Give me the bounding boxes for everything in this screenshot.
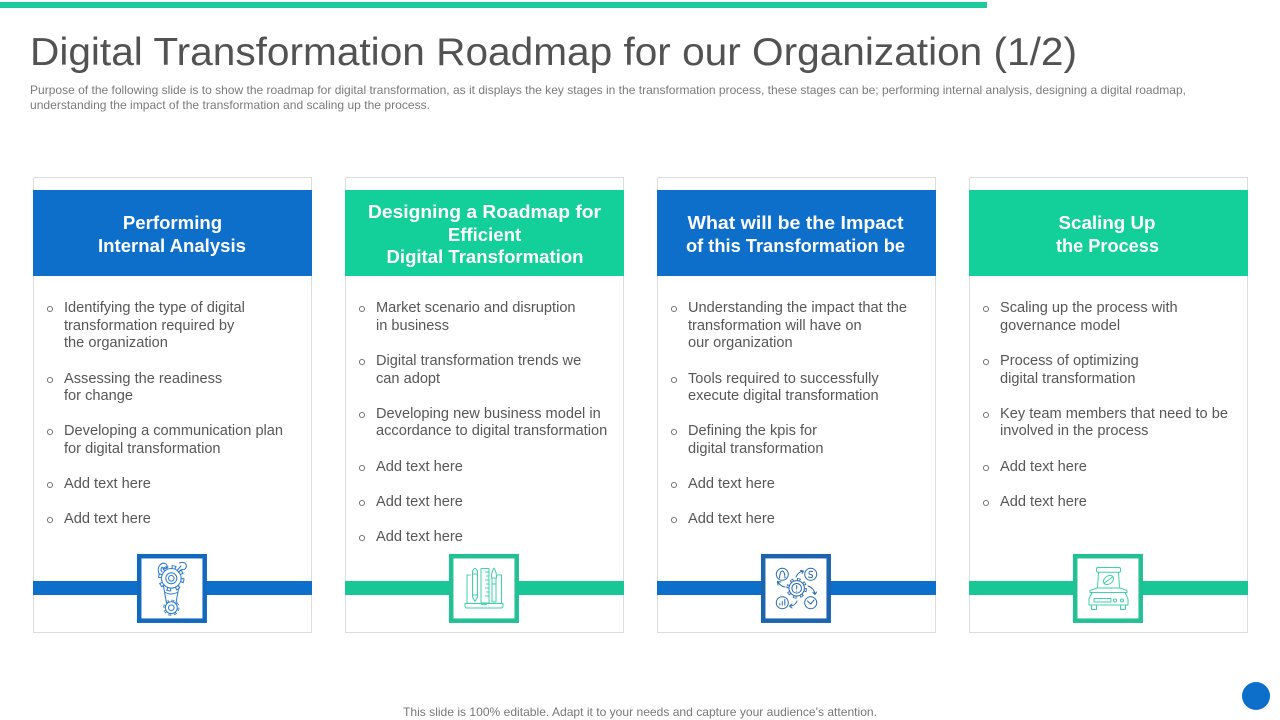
bullet list: scaling up the process: involved in the process [1000, 423, 1148, 439]
header: designing a roadmap [345, 190, 624, 276]
bullet list: designing a roadmap: in business [376, 318, 449, 334]
bullet list: performing internal analysis: for digital transformation [64, 441, 221, 457]
bullet list: performing internal analysis: the organization [64, 335, 168, 351]
footer band: green [345, 581, 624, 595]
bullet list: impact of this transformation: execute digital transformation [688, 388, 879, 404]
bullet list: designing a roadmap: Digital transformation trends we [376, 353, 581, 369]
bullet list: scaling up the process: Add text here [1000, 459, 1087, 475]
bullet list: designing a roadmap [359, 300, 607, 545]
header: scaling up the process: the Process [1056, 235, 1159, 256]
bullet list: designing a roadmap: Add text here [376, 459, 463, 475]
header: scaling up the process [969, 190, 1248, 276]
title: Digital Transformation Roadmap for our Organization (1/2) [30, 31, 1077, 74]
bullet list: designing a roadmap: accordance to digital transformation [376, 423, 607, 439]
footer note: This slide is 100% editable. Adapt it to your needs and capture your audience's attention. [403, 705, 877, 719]
header: impact of this transformation: of this Transformation be [686, 235, 905, 256]
bullet list: scaling up the process: governance model [1000, 318, 1120, 334]
bullet list: scaling up the process: Process of optimizing [1000, 353, 1139, 369]
bullet list: performing internal analysis: Add text here [64, 476, 151, 492]
bullet list: impact of this transformation: Defining the kpis for [688, 423, 817, 439]
header: performing internal analysis: Internal Analysis [98, 235, 246, 256]
bullet list: designing a roadmap: Developing new business model in [376, 406, 601, 422]
description: understanding the impact of the transformation and scaling up the process. [30, 98, 430, 112]
header: scaling up the process: Scaling Up [1058, 212, 1156, 233]
bullet list: performing internal analysis: Identifying the type of digital [64, 300, 245, 316]
bullet list: performing internal analysis: Add text here [64, 511, 151, 527]
header: impact of this transformation [657, 190, 936, 276]
bullet list: performing internal analysis: Assessing the readiness [64, 371, 222, 387]
page marker dot [1242, 682, 1270, 710]
icon: gear with metric cycle [763, 556, 829, 621]
top accent bar [0, 2, 987, 8]
panel: scaling up the process [969, 178, 1248, 632]
footer band: green [969, 581, 1248, 595]
bullet list: impact of this transformation: Add text here [688, 476, 775, 492]
bullet list: impact of this transformation [671, 300, 907, 527]
footer band: blue [657, 581, 936, 595]
bullet list: impact of this transformation: Understanding the impact that the [688, 300, 907, 316]
footer band: blue [33, 581, 312, 595]
header: designing a roadmap: Designing a Roadmap for [368, 201, 601, 222]
header: performing internal analysis: Performing [123, 212, 222, 233]
bullet list: designing a roadmap: can adopt [376, 371, 440, 387]
header: performing internal analysis [33, 190, 312, 276]
bullet list: scaling up the process: Key team members that need to be [1000, 406, 1228, 422]
header: designing a roadmap: Efficient [448, 224, 521, 245]
bullet list: impact of this transformation: Tools required to successfully [688, 371, 879, 387]
icon: gears and tools [139, 556, 205, 621]
description [30, 83, 1186, 112]
icon: weighing scale with jar [1075, 556, 1141, 621]
panel: impact of this transformation [657, 178, 936, 632]
bullet list: impact of this transformation: our organization [688, 335, 793, 351]
bullet list: scaling up the process: Scaling up the process with [1000, 300, 1178, 316]
header: designing a roadmap: Digital Transformation [386, 246, 584, 267]
bullet list: scaling up the process: Add text here [1000, 494, 1087, 510]
bullet list: scaling up the process [983, 300, 1228, 510]
bullet list: performing internal analysis [47, 300, 283, 527]
bullet list: impact of this transformation: digital transformation [688, 441, 823, 457]
bullet list: scaling up the process: digital transformation [1000, 371, 1135, 387]
bullet list: performing internal analysis: transformation required by [64, 318, 235, 334]
panel: designing a roadmap [345, 178, 624, 632]
bullet list: impact of this transformation: transformation will have on [688, 318, 862, 334]
bullet list: performing internal analysis: Developing a communication plan [64, 423, 283, 439]
bullet list: designing a roadmap: Add text here [376, 494, 463, 510]
bullet list: performing internal analysis: for change [64, 388, 133, 404]
bullet list: designing a roadmap: Market scenario and disruption [376, 300, 576, 316]
bullet list: designing a roadmap: Add text here [376, 529, 463, 545]
header: impact of this transformation: What will be the Impact [688, 212, 904, 233]
panel: performing internal analysis [33, 178, 312, 632]
description: Purpose of the following slide is to show the roadmap for digital transformation, as it displays the key stages in the transformation process, these stages can be; performing internal analysis, designing a digital roadmap, [30, 83, 1186, 97]
bullet list: impact of this transformation: Add text here [688, 511, 775, 527]
icon: laptop with design tools [451, 556, 517, 621]
